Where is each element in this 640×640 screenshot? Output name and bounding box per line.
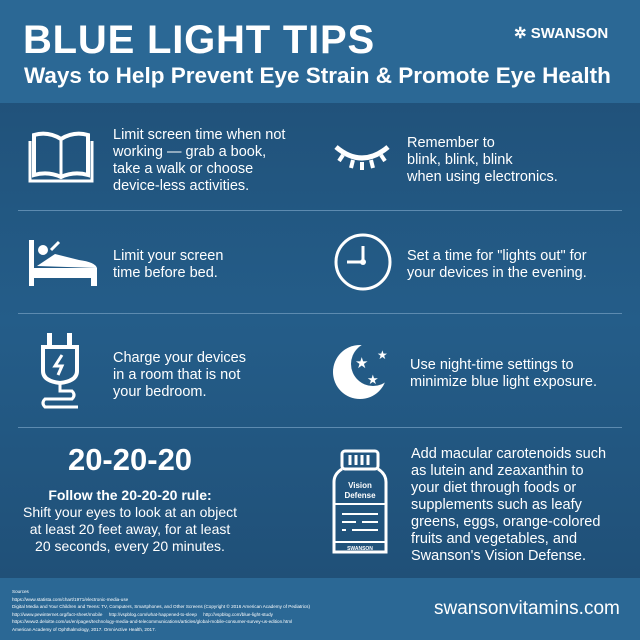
20-20-20 block: 20-20-20: [68, 442, 192, 477]
text: charge: Charge your devices: [113, 350, 246, 366]
text: blink: blink, blink, blink: [407, 152, 513, 168]
icon: moon and stars: ★: [367, 372, 379, 387]
text: limit screen time: [113, 127, 286, 194]
text: charge: your bedroom.: [113, 384, 206, 400]
text: limit screen time: device-less activities.: [113, 178, 249, 194]
text: blink: Remember to: [407, 135, 495, 151]
icon: book: [28, 132, 94, 182]
footer band: [0, 578, 640, 640]
sources: [12, 589, 310, 632]
icon: plug: [41, 333, 79, 408]
text: charge: in a room that is not: [113, 367, 240, 383]
20-20-20 block: Shift your eyes to look at an object: [23, 504, 237, 520]
20-20-20 block: Follow the 20-20-20 rule:: [48, 487, 212, 503]
icon: moon and stars: ★: [355, 355, 368, 372]
text: carotenoids: fruits and vegetables, and: [411, 531, 577, 547]
text: lights out: [407, 248, 587, 281]
text: carotenoids: supplements such as leafy: [411, 497, 582, 513]
icon: vision defense bottle: SWANSON: [347, 546, 373, 552]
text: limit screen time: Limit screen time when not: [113, 127, 285, 143]
text: lights out: Set a time for "lights out" for: [407, 248, 587, 264]
icon: moon and stars: ★: [377, 348, 388, 362]
website: swansonvitamins.com: [434, 598, 620, 619]
icon: vision defense bottle: [332, 450, 388, 554]
header band: [0, 0, 640, 103]
text: carotenoids: [411, 446, 606, 564]
20-20-20 block: at least 20 feet away, for at least: [30, 521, 230, 537]
text: blink: [407, 135, 558, 185]
subtitle: Ways to Help Prevent Eye Strain & Promote Eye Health: [24, 63, 611, 88]
text: carotenoids: greens, eggs, orange-colored: [411, 514, 600, 530]
text: charge: [113, 350, 246, 400]
sources: https://www.statista.com/chart/1971/electronic-media-use: [12, 596, 128, 602]
text: before bed: Limit your screen: [113, 248, 223, 264]
sources: Sources: [12, 589, 29, 594]
sources: http://www.pewinternet.org/fact-sheet/mobile http://vspblog.com/what-happened-to-sleep http://vspblog.com/blue-light-study: [12, 612, 273, 616]
icon: vision defense bottle: Defense: [344, 491, 376, 500]
icon: closed eye: [334, 145, 390, 170]
logo: ✲ SWANSON: [514, 25, 608, 42]
text: blink: when using electronics.: [407, 169, 558, 185]
text: carotenoids: Add macular carotenoids such: [411, 446, 606, 462]
text: before bed: time before bed.: [113, 265, 218, 281]
icon: vision defense bottle: Vision: [348, 481, 372, 490]
sources: American Academy of Ophthalmology, 2017. OmniActive Health, 2017.: [12, 626, 156, 632]
sources: Digital Media and Your Children and Teens: TV, Computers, Smartphones, and Other Screens (Copyright © 2016 American Academy of Pediatrics): [12, 604, 310, 609]
text: carotenoids: your diet through foods or: [411, 480, 576, 496]
text: carotenoids: as lutein and zeaxanthin to: [411, 463, 584, 479]
20-20-20 block: [23, 442, 237, 554]
sources: https://www2.deloitte.com/us/en/pages/technology-media-and-telecommunications/articles/global-mobile-consumer-survey-us-edition.html: [12, 619, 292, 624]
text: night-time: Use night-time settings to: [410, 357, 574, 373]
icon: clock: [334, 234, 392, 290]
icon: bed: [29, 240, 97, 286]
text: limit screen time: take a walk or choose: [113, 161, 253, 177]
icon: moon and stars: [333, 345, 388, 399]
text: night-time: minimize blue light exposure.: [410, 374, 597, 390]
text: night-time: [410, 357, 597, 390]
text: carotenoids: Swanson's Vision Defense.: [411, 548, 586, 564]
text: before bed: [113, 248, 223, 281]
20-20-20 block: 20 seconds, every 20 minutes.: [35, 538, 225, 554]
title: BLUE LIGHT TIPS: [23, 18, 375, 62]
text: lights out: your devices in the evening.: [407, 265, 587, 281]
text: limit screen time: working — grab a book,: [113, 144, 266, 160]
